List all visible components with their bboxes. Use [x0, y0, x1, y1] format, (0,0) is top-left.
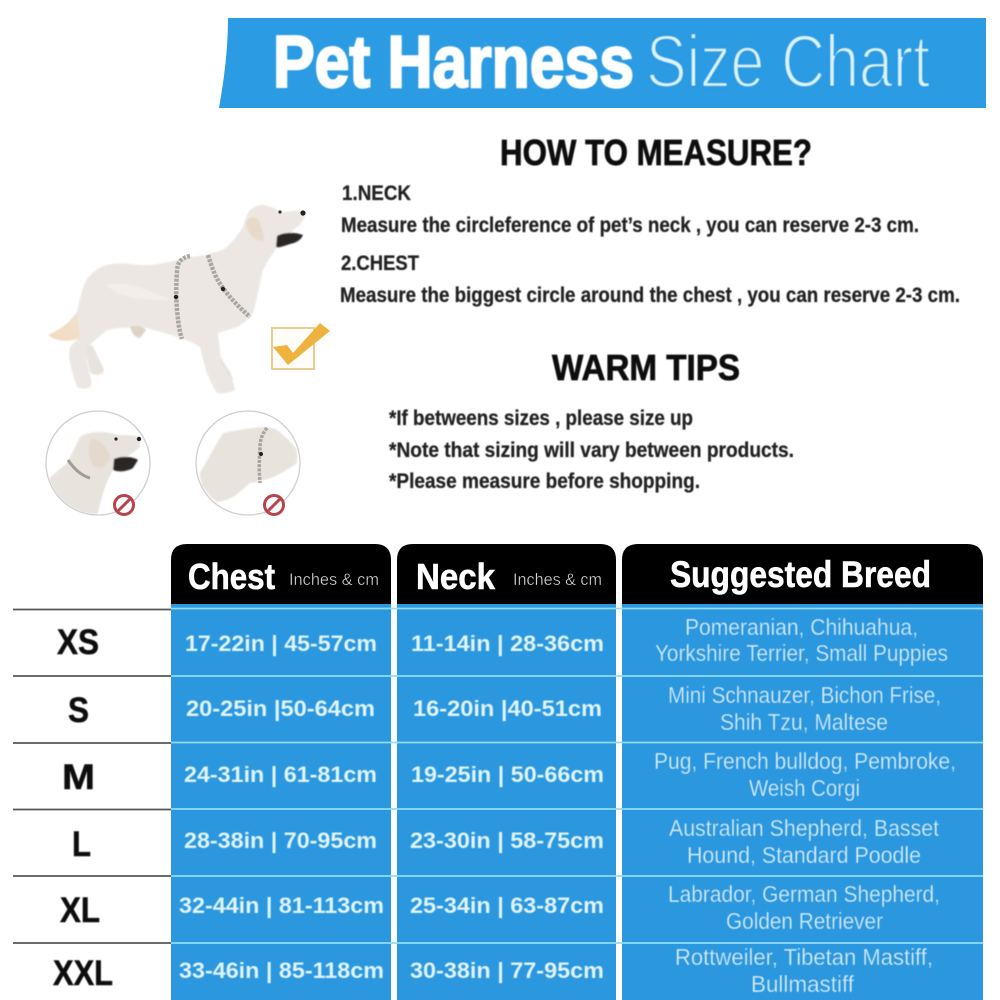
icon: correct checkmark: [272, 323, 330, 369]
row: XXL: Bullmastiff: [751, 971, 855, 997]
tips list: [389, 407, 794, 493]
row: XL: 32-44in | 81-113cm: [179, 893, 384, 918]
title: [273, 20, 930, 103]
row: L: 28-38in | 70-95cm: [184, 828, 377, 853]
column: chest: Inches & cm: [289, 570, 379, 589]
tips list: *Please measure before shopping.: [389, 470, 700, 493]
harness neck strap: [208, 255, 250, 317]
harness chest strap: [176, 256, 190, 339]
row: L: L: [72, 825, 91, 864]
row: L: Australian Shepherd, Basset: [669, 815, 940, 841]
column: neck: [397, 544, 616, 1000]
wrong fit photo: collar too tight: [196, 411, 300, 515]
row: L: [72, 815, 940, 868]
row: XXL: Rottweiler, Tibetan Mastiff,: [675, 944, 933, 970]
row: XL: [60, 881, 940, 934]
row: XL: Labrador, German Shepherd,: [668, 881, 940, 907]
row: S: Shih Tzu, Maltese: [720, 709, 888, 735]
row: M: Weish Corgi: [749, 775, 860, 801]
row: XXL: XXL: [53, 954, 113, 993]
column: chest: Chest: [188, 556, 275, 597]
row: S: [68, 682, 941, 735]
row: M: 24-31in | 61-81cm: [184, 762, 377, 787]
measuring instructions: [340, 182, 960, 307]
row: XL: XL: [60, 891, 100, 930]
row: S: 16-20in |40-51cm: [413, 696, 602, 721]
title: Pet Harness: [273, 22, 634, 103]
row: XS: [57, 614, 948, 666]
row: M: Pug, French bulldog, Pembroke,: [654, 748, 956, 774]
row: S: Mini Schnauzer, Bichon Frise,: [668, 682, 941, 708]
illustration: dog wearing harness: [48, 205, 306, 393]
row: XS: Pomeranian, Chihuahua,: [685, 614, 918, 640]
tips list: *If betweens sizes , please size up: [389, 407, 693, 430]
row: XS: XS: [57, 623, 99, 662]
column: neck: Neck: [416, 556, 496, 597]
heading: warm tips: WARM TIPS: [552, 347, 740, 388]
heading: how to measure: HOW TO MEASURE?: [500, 132, 812, 173]
row: XL: Golden Retriever: [726, 908, 883, 934]
row: XXL: 30-38in | 77-95cm: [410, 958, 604, 983]
measuring instructions: Measure the circleference of pet’s neck , you can reserve 2-3 cm.: [341, 214, 919, 237]
row: XXL: [53, 944, 933, 997]
row: XS: Yorkshire Terrier, Small Puppies: [655, 640, 948, 666]
measuring instructions: 1.NECK: [342, 182, 411, 205]
wrong fit photo: collar too high: [46, 411, 150, 516]
row: XXL: 33-46in | 85-118cm: [179, 958, 384, 983]
size table: [13, 544, 983, 1000]
column: suggested breed: [622, 544, 983, 1000]
column: chest: [171, 544, 391, 1000]
row: L: 23-30in | 58-75cm: [410, 828, 604, 853]
row: S: S: [68, 691, 89, 730]
row: XS: 11-14in | 28-36cm: [411, 631, 604, 656]
column: neck: Inches & cm: [513, 570, 602, 589]
row: S: 20-25in |50-64cm: [186, 696, 375, 721]
row: XS: 17-22in | 45-57cm: [185, 631, 377, 656]
tips list: *Note that sizing will vary between products.: [389, 439, 794, 462]
row dividers: [13, 608, 983, 943]
row: L: Hound, Standard Poodle: [687, 842, 921, 868]
column: suggested breed: Suggested Breed: [670, 554, 931, 595]
measuring instructions: 2.CHEST: [341, 252, 419, 275]
row: M: 19-25in | 50-66cm: [411, 762, 604, 787]
row: XL: 25-34in | 63-87cm: [410, 893, 604, 918]
icon: prohibited: [264, 496, 284, 514]
row: M: [62, 748, 956, 801]
row: M: M: [62, 758, 95, 797]
title banner: [219, 18, 986, 108]
icon: prohibited: [114, 496, 134, 514]
title: Size Chart: [646, 20, 930, 103]
